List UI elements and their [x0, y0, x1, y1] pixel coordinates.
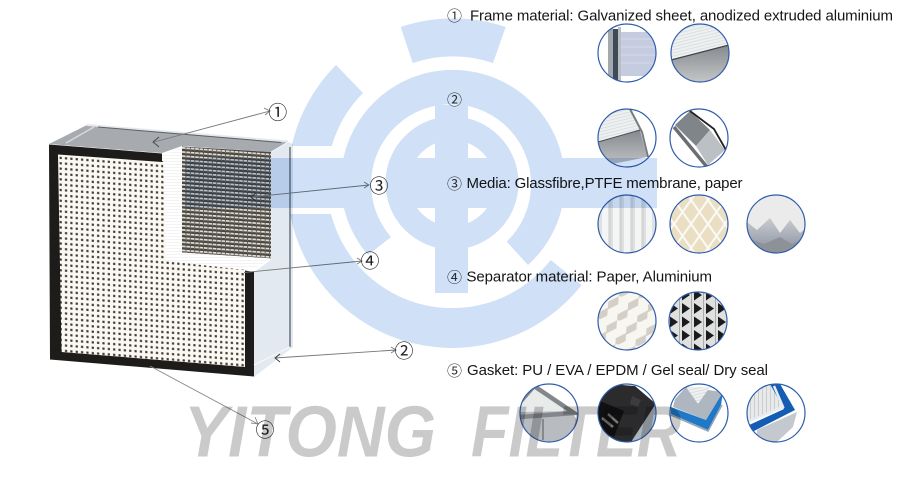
callout number 2: ②: [394, 336, 414, 364]
logo bottom arc: [290, 214, 582, 348]
logo left arc: [292, 65, 363, 146]
heading: media: ③: [447, 173, 462, 194]
logo left bar: [185, 158, 345, 208]
arrow 1: [153, 108, 270, 147]
black gasket: [49, 144, 254, 376]
thumbnail: gasket gel seal: [748, 384, 797, 442]
watermark: brand name: FILTER: [471, 392, 681, 472]
arrow 2: [275, 347, 396, 362]
frame thumbnails outline: [598, 24, 729, 82]
thumbnail: gasket EPDM: [670, 387, 723, 432]
thumbnail: gasket PU: [520, 384, 578, 442]
arrow 3: [251, 182, 369, 201]
media thumbnails outline: [598, 195, 805, 253]
logo right bar: [558, 158, 657, 208]
thumbnail: aluminium corner: [598, 110, 649, 164]
thumbnail: gasket EVA: [598, 384, 656, 442]
gasket thumbnails outline: [520, 384, 805, 442]
logo disc: [386, 105, 518, 293]
heading: frame material: Frame material: Galvanized sheet, anodized extruded aluminium: [470, 8, 893, 24]
heading: separator material: Separator material: Paper, Aluminium: [466, 268, 712, 286]
thumbnail: frame corner: [671, 24, 729, 82]
thumbnail: PTFE lattice: [670, 195, 728, 253]
side edge detail: [254, 142, 290, 365]
thumbnail: glassfibre pleats: [598, 195, 656, 253]
heading: media: Media: Glassfibre,PTFE membrane, paper: [466, 175, 742, 192]
watermark: logo: [185, 18, 657, 348]
heading: frame material: ①: [447, 5, 462, 26]
callout number 1: ①: [268, 98, 287, 125]
logo top arc: [401, 18, 506, 63]
thumbnail: paper separator: [598, 292, 656, 350]
recessed media: [182, 146, 271, 258]
watermark: brand name: YITONG: [184, 392, 436, 472]
filter top face: [49, 125, 288, 153]
arrow 4: [244, 258, 362, 272]
watermark: brand name: [184, 392, 681, 472]
heading: gasket: Gasket: PU / EVA / EPDM / Gel seal/ Dry seal: [467, 362, 768, 379]
thumbnail: frame section: [608, 27, 656, 81]
heading: gasket: ⑤: [447, 360, 462, 381]
logo ring: [341, 70, 565, 265]
callout number 3: ③: [370, 172, 389, 198]
filter side face: [254, 142, 293, 377]
arrow 5: [150, 366, 258, 424]
heading: separator material: ④: [447, 267, 462, 288]
thumbnail: aluminium separator: [669, 292, 727, 350]
heading: number 2: ②: [447, 89, 462, 110]
aluminium thumbnails outline: [598, 109, 728, 167]
callout number 4: ④: [360, 246, 380, 274]
thumbnail: extruded profile: [672, 110, 726, 166]
white cut bevels: [162, 146, 182, 261]
front media: [58, 153, 246, 368]
thumbnail: paper media: [747, 195, 805, 253]
separator thumbnails outline: [598, 292, 727, 350]
filter illustration: [49, 125, 293, 377]
callout number 5: ⑤: [256, 416, 275, 442]
